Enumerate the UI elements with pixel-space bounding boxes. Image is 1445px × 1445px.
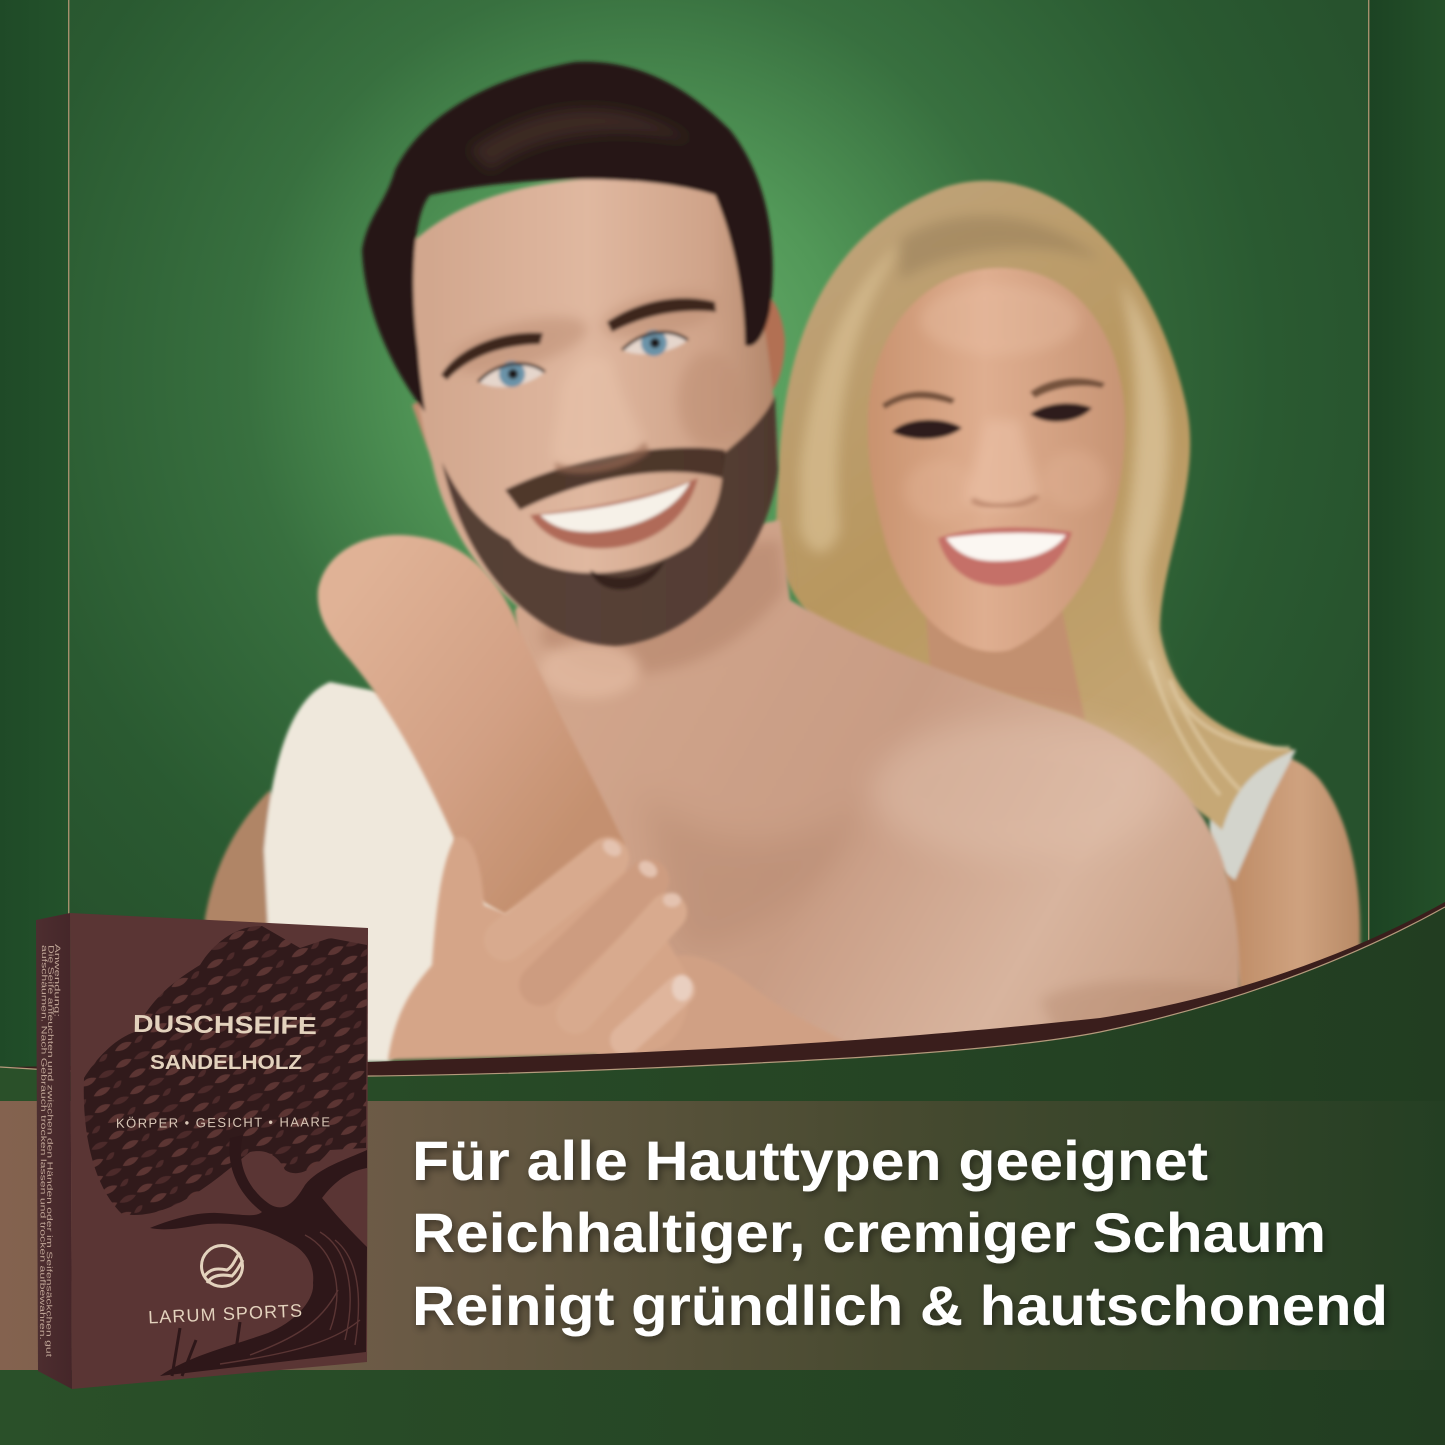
man torso xyxy=(515,520,1240,1060)
text strip background xyxy=(0,1101,1445,1370)
brand logo xyxy=(202,1246,243,1286)
box front panel xyxy=(70,913,368,1389)
box side panel xyxy=(36,913,72,1389)
hands xyxy=(388,837,852,1060)
woman arm around neck xyxy=(318,535,625,915)
tree illustration xyxy=(84,926,367,1376)
claim 1: Für alle Hauttypen geeignet xyxy=(412,1129,1208,1192)
brand name: LARUM SPORTS xyxy=(148,1301,302,1327)
man nose xyxy=(552,357,645,464)
man eyes xyxy=(478,365,545,387)
curved dark band and green footer xyxy=(0,902,1445,1445)
man beard xyxy=(442,395,778,646)
box side panel: aufschäumen. Nach Gebrauch trocken lassen und trocken aufbewahren. xyxy=(38,945,49,1340)
box title: DUSCHSEIFE xyxy=(133,1011,317,1040)
claim 3: Reinigt gründlich & hautschonend xyxy=(412,1274,1388,1337)
photo: couple xyxy=(205,62,1360,1062)
towel and far arm xyxy=(205,682,560,1062)
box use line: KÖRPER • GESICHT • HAARE xyxy=(116,1114,330,1131)
man eyebrows xyxy=(441,333,543,380)
claim 2: Reichhaltiger, cremiger Schaum xyxy=(412,1201,1326,1264)
man head xyxy=(362,62,785,646)
benefit claims xyxy=(412,1129,1388,1337)
box side panel: Die Seife anfeuchten und zwischen den Händen oder im Seifensäckchen gut xyxy=(44,945,55,1358)
man smile xyxy=(530,478,698,548)
box side panel: Anwendung: xyxy=(53,944,62,1017)
woman xyxy=(775,181,1360,995)
product box xyxy=(36,913,368,1389)
box subtitle: SANDELHOLZ xyxy=(150,1052,302,1074)
man hair xyxy=(362,62,773,412)
